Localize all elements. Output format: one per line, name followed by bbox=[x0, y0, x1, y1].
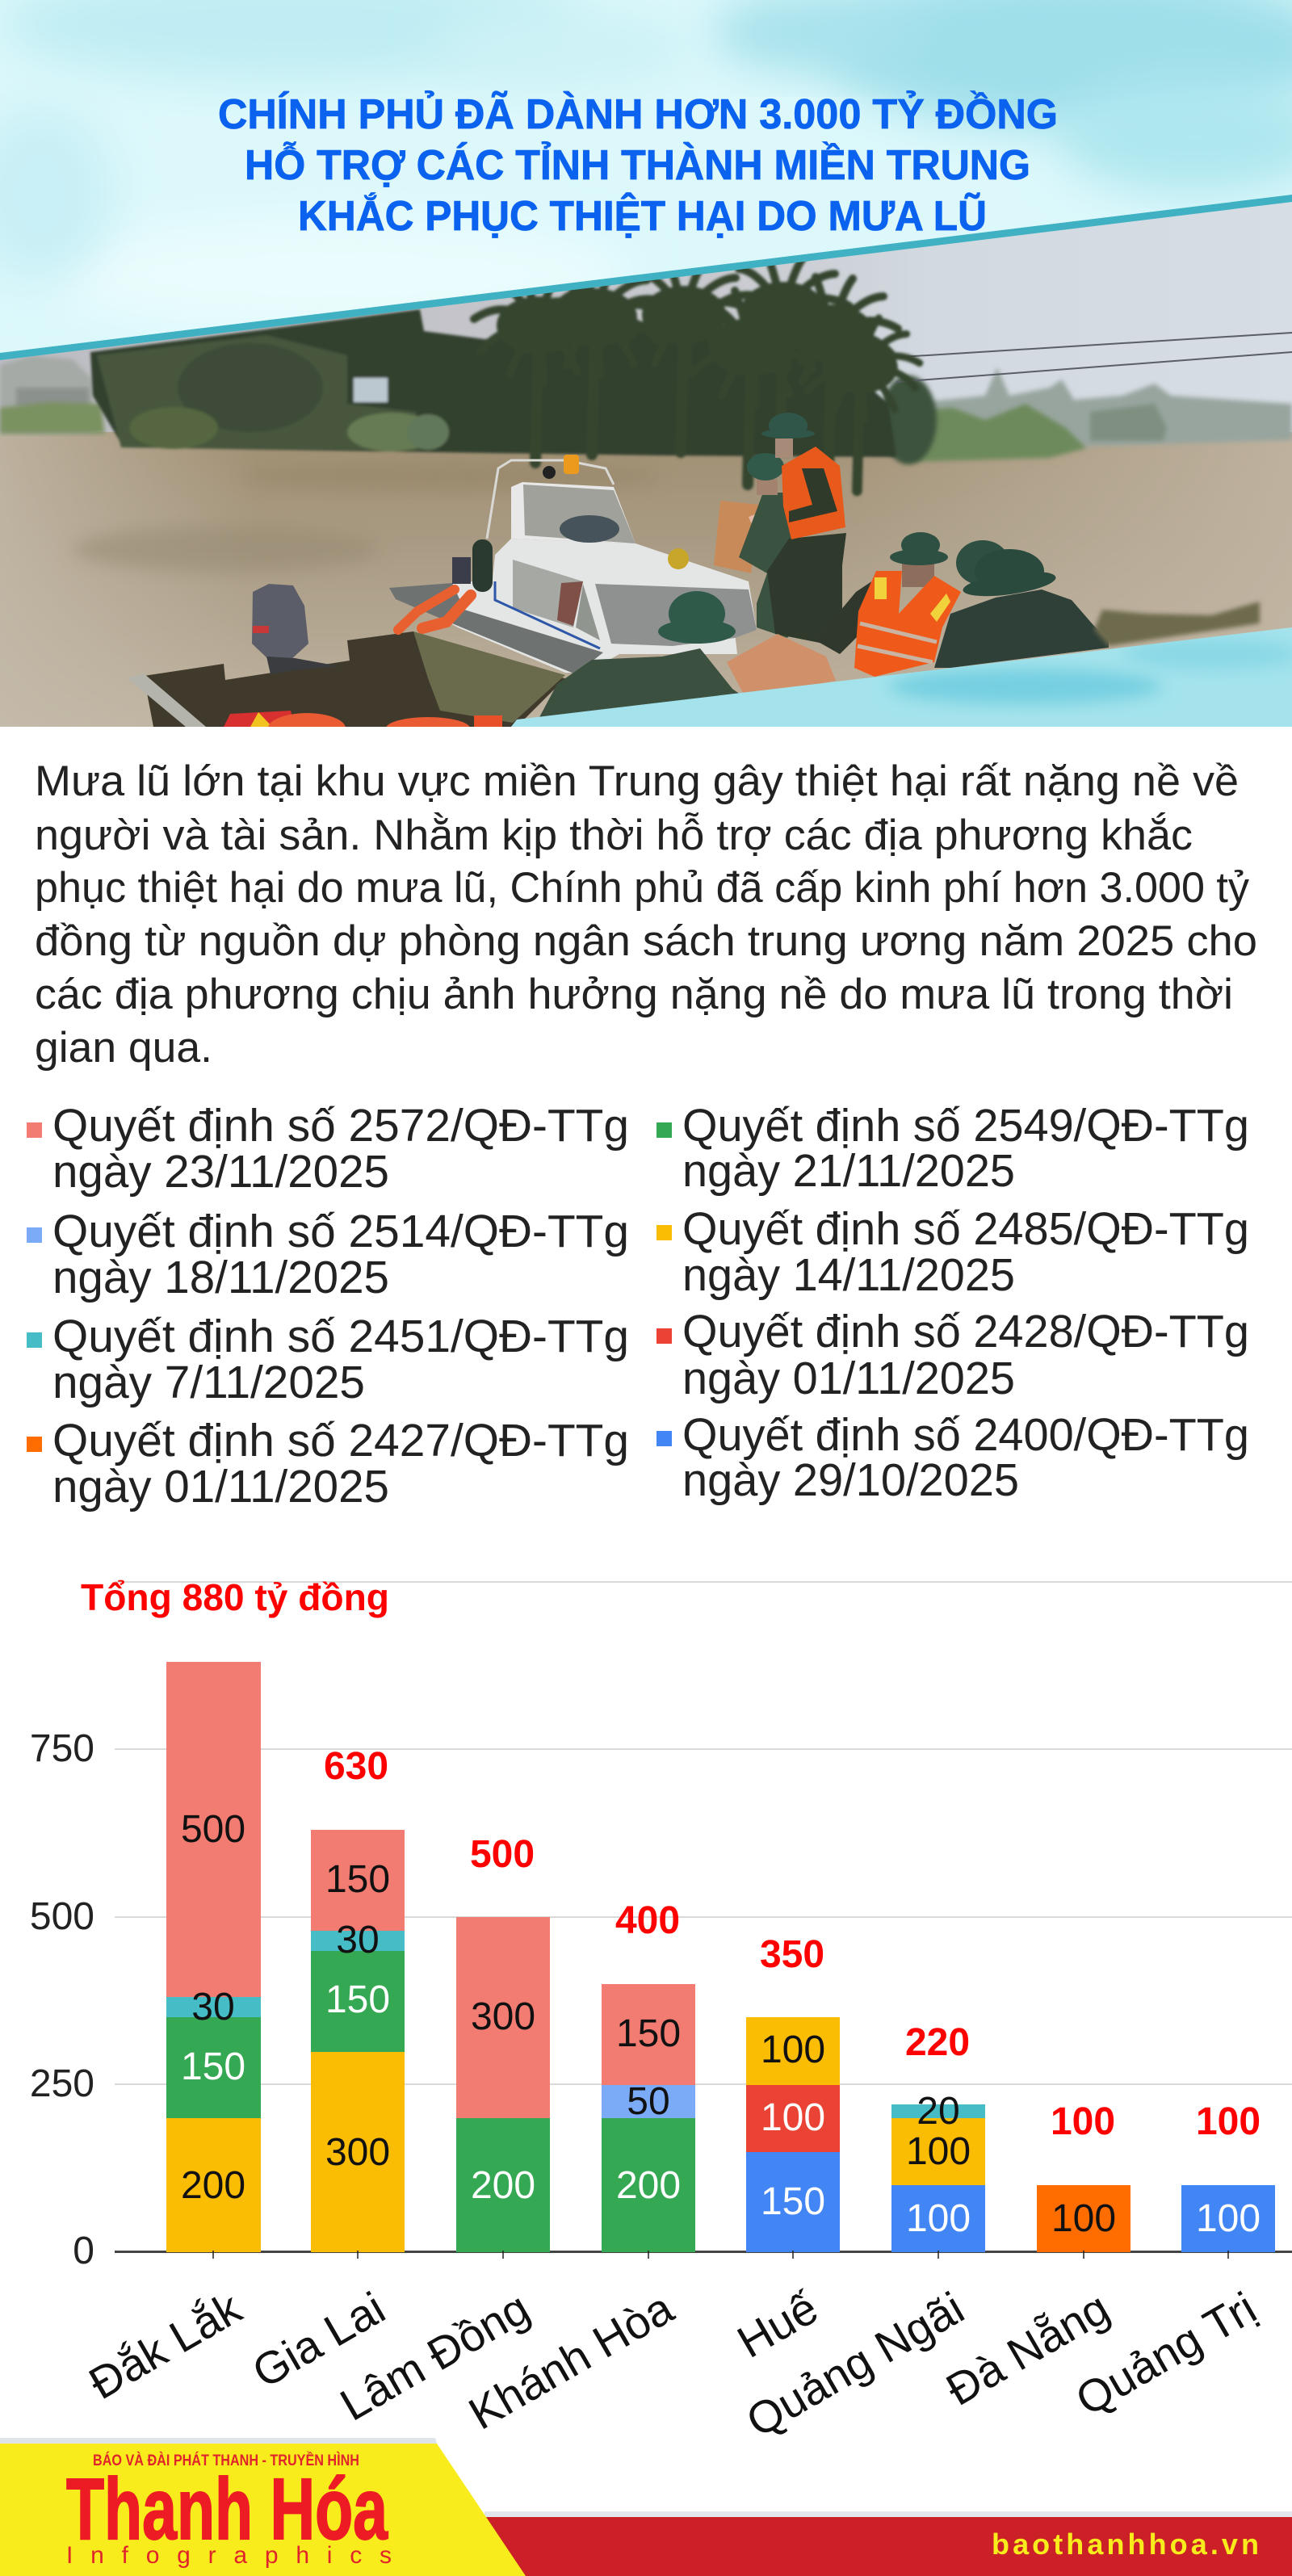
intro paragraph: đồng từ nguồn dự phòng ngân sách trung ương năm 2025 cho bbox=[35, 917, 1257, 965]
legend item 2572: Quyết định số 2572/QĐ-TTg bbox=[52, 1100, 629, 1152]
bar: Gia Lai bbox=[311, 1830, 405, 2252]
legend item 2514: ngày 18/11/2025 bbox=[52, 1252, 389, 1303]
bar: Quảng Ngãi bbox=[891, 2090, 985, 2252]
website: baothanhhoa.vn bbox=[992, 2528, 1259, 2561]
footer red band bbox=[484, 2511, 1292, 2576]
distant trees right bbox=[880, 367, 1292, 464]
legend item 2572 bbox=[27, 1100, 629, 1198]
legend item 2400: Quyết định số 2400/QĐ-TTg bbox=[682, 1409, 1249, 1461]
intro paragraph: các địa phương chịu ảnh hưởng nặng nề do mưa lũ trong thời bbox=[35, 971, 1233, 1018]
total labels: 630 bbox=[324, 1745, 388, 1788]
y axis labels: 750 bbox=[30, 1727, 94, 1770]
header watercolor background bbox=[0, 0, 1292, 371]
box in foreground bbox=[727, 634, 836, 693]
teal diagonal band bbox=[0, 195, 1292, 360]
category labels: Đắk Lắk bbox=[81, 2281, 250, 2409]
legend item 2427 bbox=[27, 1415, 629, 1512]
soldier in orange vest bbox=[816, 532, 961, 677]
bar: Khánh Hòa bbox=[602, 1984, 695, 2252]
legend item 2400 bbox=[656, 1409, 1249, 1506]
legend item 2400: ngày 29/10/2025 bbox=[682, 1454, 1019, 1506]
bar: Đà Nẵng: 100 bbox=[1051, 2197, 1116, 2240]
bar: Quảng Ngãi: 100 bbox=[906, 2197, 971, 2240]
legend item 2572: ngày 23/11/2025 bbox=[52, 1146, 389, 1198]
bar: Quảng Trị: 100 bbox=[1196, 2197, 1261, 2240]
y axis labels: 0 bbox=[73, 2230, 94, 2272]
soldier behind boxes bbox=[739, 453, 791, 638]
legend item 2428 bbox=[656, 1306, 1249, 1404]
legend item 2549: ngày 21/11/2025 bbox=[682, 1145, 1015, 1197]
intro paragraph: người và tài sản. Nhằm kịp thời hỗ trợ các địa phương khắc bbox=[35, 812, 1193, 859]
legend item 2485: Quyết định số 2485/QĐ-TTg bbox=[682, 1203, 1249, 1255]
bar: Đắk Lắk: 30 bbox=[191, 1986, 235, 2028]
main tree line bbox=[90, 254, 920, 491]
bar: Đà Nẵng bbox=[1037, 2185, 1130, 2252]
relief boxes bbox=[714, 501, 759, 573]
bar: Lâm Đồng: 300 bbox=[471, 1995, 535, 2038]
title: CHÍNH PHỦ ĐÃ DÀNH HƠN 3.000 TỶ ĐỒNG bbox=[218, 90, 1058, 138]
legend item 2451 bbox=[27, 1311, 629, 1408]
intro paragraph bbox=[35, 757, 1257, 1072]
total labels: 100 bbox=[1196, 2100, 1261, 2143]
category labels: Gia Lai bbox=[244, 2282, 393, 2398]
distant trees left bbox=[0, 355, 105, 434]
soldiers in green raincoats bbox=[934, 540, 1109, 668]
category labels: Huế bbox=[729, 2282, 826, 2368]
legend item 2428: Quyết định số 2428/QĐ-TTg bbox=[682, 1306, 1249, 1357]
total labels: Tổng 880 tỷ đồng bbox=[81, 1576, 389, 1618]
legend item 2427: Quyết định số 2427/QĐ-TTg bbox=[52, 1415, 629, 1466]
green cargo boat bbox=[128, 631, 565, 727]
legend item 2485 bbox=[656, 1203, 1249, 1301]
bar: Gia Lai: 300 bbox=[325, 2131, 390, 2174]
intro paragraph: Mưa lũ lớn tại khu vực miền Trung gây thiệt hại rất nặng nề về bbox=[35, 757, 1239, 805]
riverbank grass bbox=[1094, 602, 1260, 646]
category labels: Khánh Hòa bbox=[460, 2281, 682, 2440]
grid lines bbox=[115, 1582, 1292, 2084]
legend bbox=[27, 1100, 1249, 1512]
bar: Đắk Lắk bbox=[166, 1662, 261, 2252]
x axis line bbox=[115, 2251, 1292, 2253]
title: KHẮC PHỤC THIỆT HẠI DO MƯA LŨ bbox=[298, 192, 987, 240]
bar: Khánh Hòa: 200 bbox=[616, 2164, 681, 2207]
white speedboat bbox=[389, 455, 757, 674]
bar: Gia Lai: 30 bbox=[336, 1919, 380, 1961]
intro paragraph: gian qua. bbox=[35, 1024, 212, 1072]
bar: Khánh Hòa: 50 bbox=[627, 2080, 670, 2123]
logo tagline: BÁO VÀ ĐÀI PHÁT THANH - TRUYỀN HÌNH bbox=[93, 2452, 359, 2469]
legend item 2549: Quyết định số 2549/QĐ-TTg bbox=[682, 1100, 1249, 1152]
total labels: 400 bbox=[615, 1899, 680, 1942]
stacked bar chart bbox=[30, 1576, 1292, 2447]
bar: Gia Lai: 150 bbox=[325, 1978, 390, 2021]
legend item 2427: ngày 01/11/2025 bbox=[52, 1461, 389, 1512]
bar: Đắk Lắk: 200 bbox=[181, 2164, 245, 2207]
bar: Quảng Ngãi: 20 bbox=[917, 2090, 960, 2133]
y axis labels: 500 bbox=[30, 1895, 94, 1938]
total labels: 350 bbox=[760, 1933, 824, 1976]
bar: Lâm Đồng: 200 bbox=[471, 2164, 535, 2207]
footer logo bbox=[0, 2438, 526, 2576]
category labels: Lâm Đồng bbox=[332, 2282, 538, 2431]
category labels: Đà Nẵng bbox=[938, 2282, 1118, 2415]
total labels bbox=[81, 1576, 1261, 2143]
category labels: Quảng Trị bbox=[1068, 2282, 1265, 2425]
flood water bbox=[0, 432, 1292, 731]
total labels: 220 bbox=[905, 2021, 970, 2064]
y axis labels: 250 bbox=[30, 2062, 94, 2105]
bar: Khánh Hòa: 150 bbox=[616, 2012, 681, 2055]
bar: Huế: 100 bbox=[761, 2096, 825, 2139]
total labels: 100 bbox=[1051, 2100, 1115, 2143]
soldier standing with life vest bbox=[761, 413, 846, 644]
bar: Huế bbox=[746, 2017, 840, 2252]
bar: Huế: 100 bbox=[761, 2028, 825, 2071]
category labels bbox=[81, 2281, 1265, 2447]
bar: Quảng Ngãi: 100 bbox=[906, 2130, 971, 2173]
bar: Huế: 150 bbox=[761, 2180, 825, 2223]
outboard motor bbox=[252, 584, 339, 674]
logo subtitle: Infographics bbox=[66, 2542, 392, 2569]
sky bbox=[0, 202, 1292, 432]
legend item 2514 bbox=[27, 1206, 629, 1303]
total labels: 500 bbox=[470, 1833, 535, 1876]
legend item 2428: ngày 01/11/2025 bbox=[682, 1353, 1015, 1404]
bar: Lâm Đồng bbox=[456, 1917, 550, 2252]
legend item 2451: ngày 7/11/2025 bbox=[52, 1357, 365, 1408]
category labels: Quảng Ngãi bbox=[738, 2282, 972, 2447]
power lines bbox=[888, 333, 1292, 382]
logo name: Thanh Hóa bbox=[66, 2460, 388, 2557]
legend item 2451: Quyết định số 2451/QĐ-TTg bbox=[52, 1311, 629, 1362]
soldier in foreground bbox=[539, 591, 740, 719]
legend item 2549 bbox=[656, 1100, 1249, 1197]
bar: Gia Lai: 150 bbox=[325, 1858, 390, 1901]
title bbox=[218, 90, 1058, 240]
bar: Đắk Lắk: 500 bbox=[181, 1808, 245, 1851]
flood rescue photo bbox=[0, 194, 1292, 744]
axis ticks bbox=[213, 2251, 1228, 2259]
y axis labels bbox=[30, 1727, 94, 2272]
legend item 2514: Quyết định số 2514/QĐ-TTg bbox=[52, 1206, 629, 1257]
intro paragraph: phục thiệt hại do mưa lũ, Chính phủ đã cấp kinh phí hơn 3.000 tỷ bbox=[35, 864, 1249, 912]
bottom right watercolor corner bbox=[501, 622, 1292, 727]
life rings on cargo boat bbox=[224, 711, 502, 727]
title: HỖ TRỢ CÁC TỈNH THÀNH MIỀN TRUNG bbox=[245, 141, 1030, 189]
bar: Quảng Trị bbox=[1181, 2185, 1275, 2252]
legend item 2485: ngày 14/11/2025 bbox=[682, 1249, 1015, 1301]
bar: Đắk Lắk: 150 bbox=[181, 2045, 245, 2088]
